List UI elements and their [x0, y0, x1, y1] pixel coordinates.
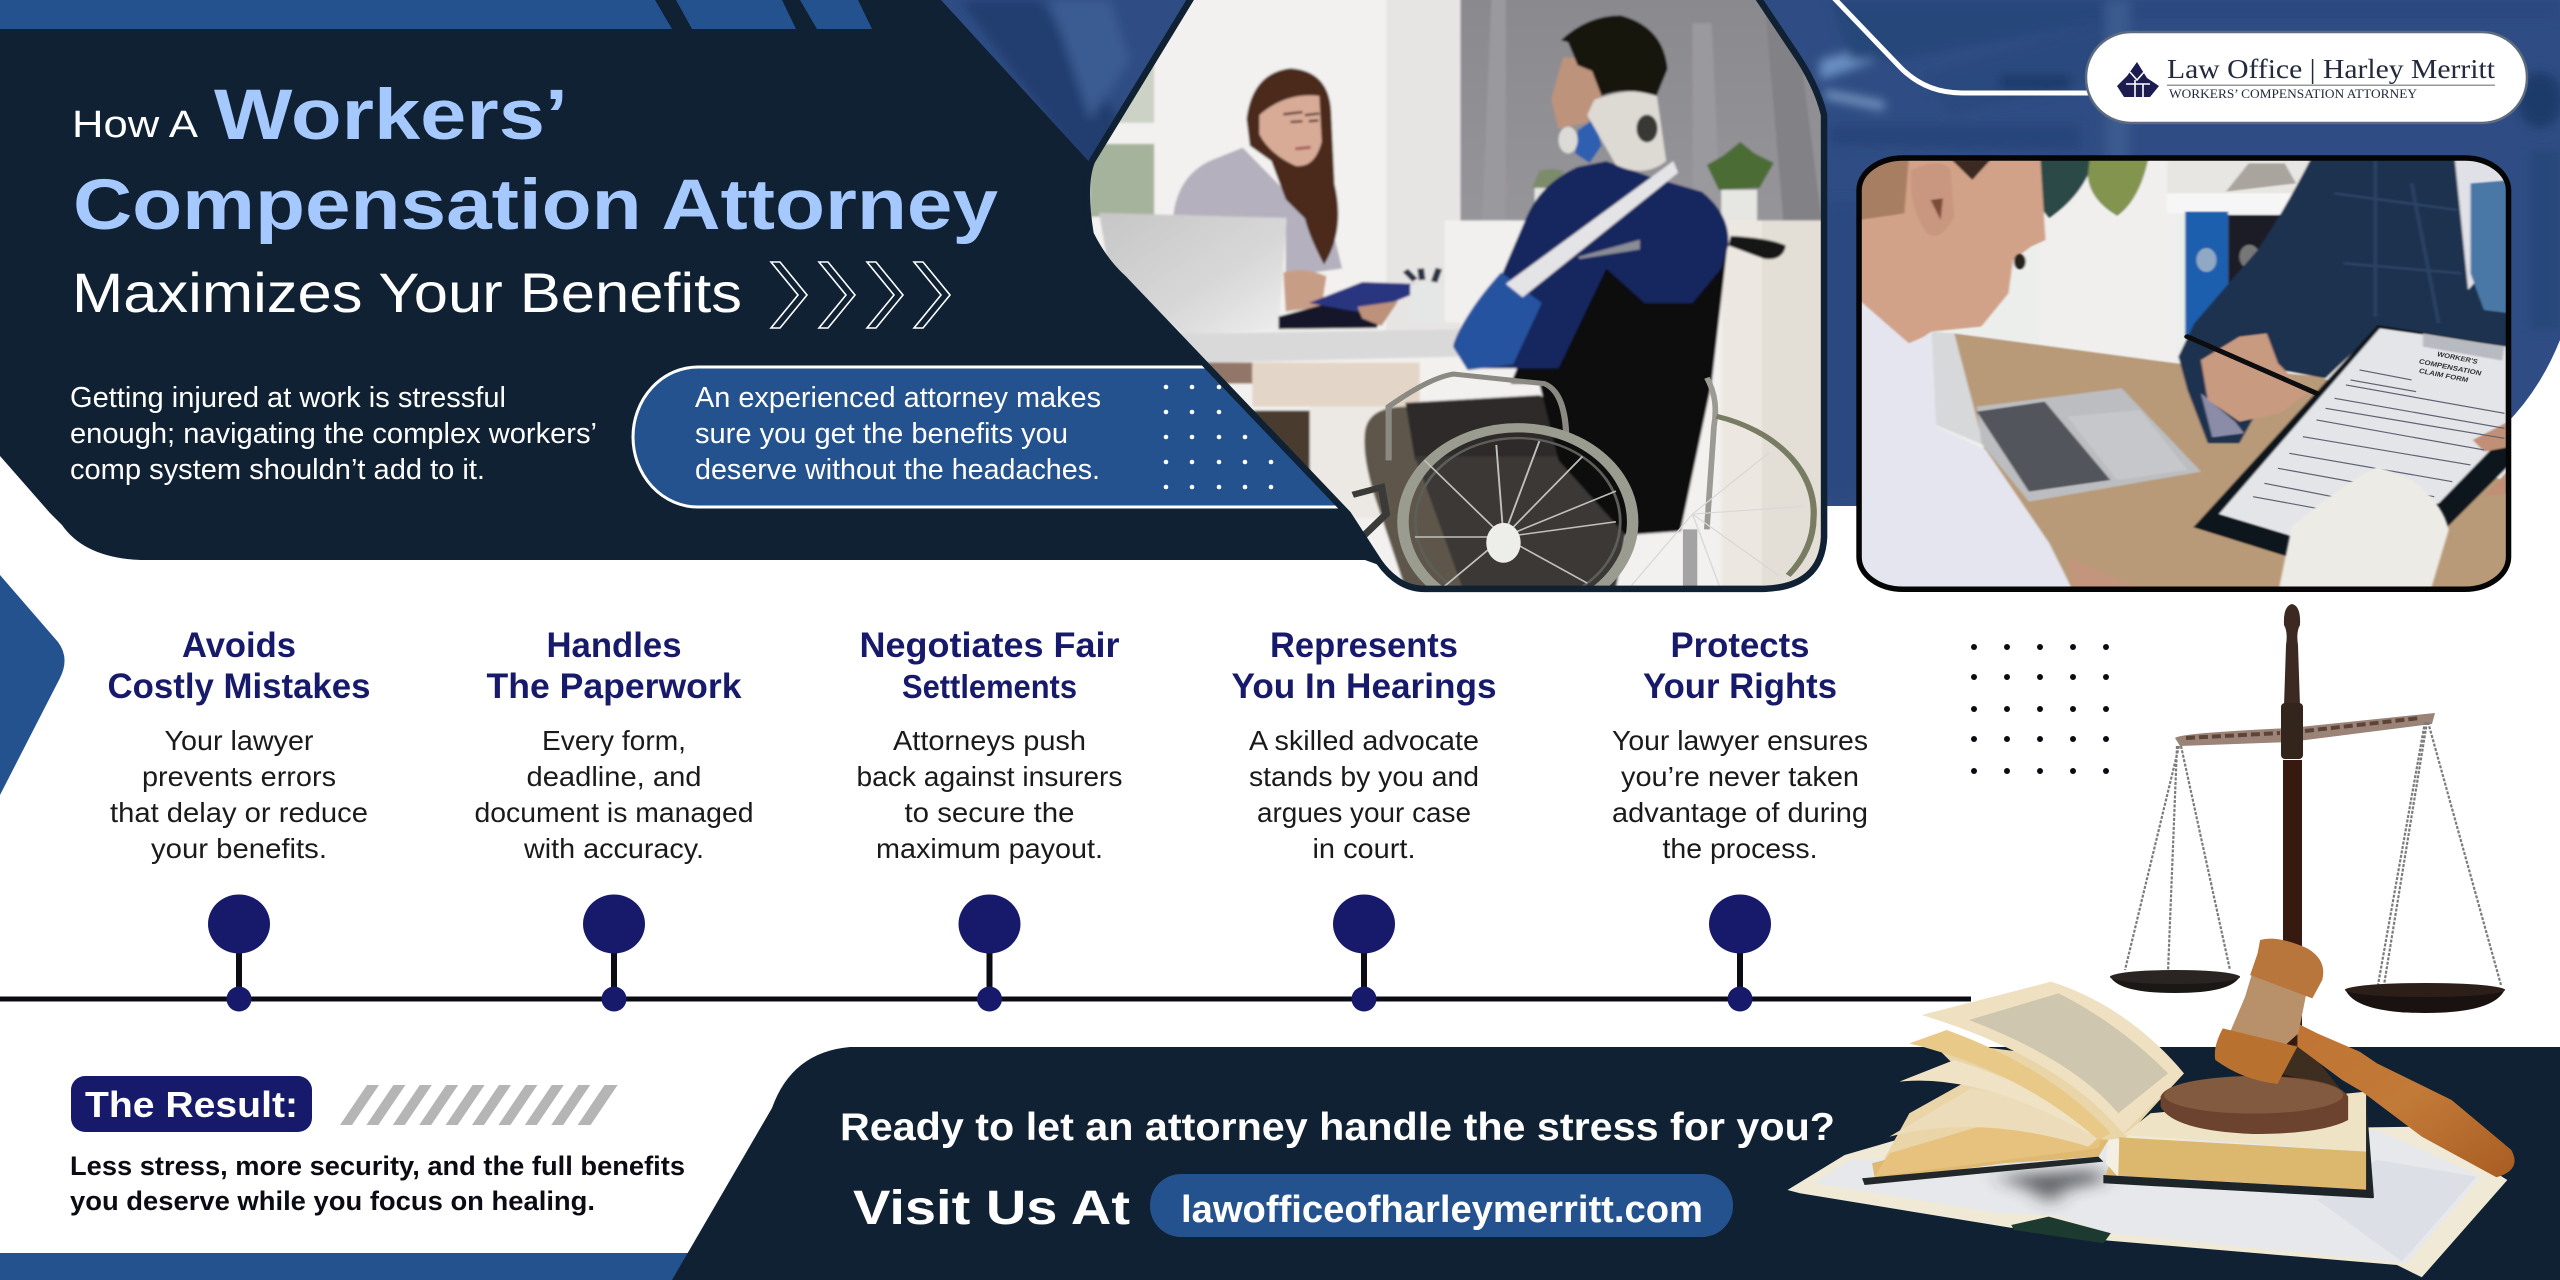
benefit: handles the paperwork: The Paperwork: [486, 667, 742, 706]
benefit: protects your rights: Protects: [1670, 626, 1810, 665]
benefit: avoids costly mistakes: Your lawyer: [164, 725, 314, 756]
benefit: negotiates fair settlements: [856, 626, 1122, 1012]
benefit: protects your rights: advantage of during: [1612, 797, 1868, 828]
left edge arrow tab: [0, 575, 65, 795]
photo: claim form review: [1850, 150, 2529, 597]
lower book: [1787, 1127, 2507, 1277]
benefit: avoids costly mistakes: Avoids: [182, 626, 296, 665]
illustration: law books and gavel: [1787, 939, 2515, 1277]
form title: WORKER'S: [2436, 350, 2479, 366]
benefit: protects your rights: Your Rights: [1643, 667, 1837, 706]
striped accent: [340, 1085, 618, 1125]
callout: attorney pill: deserve without the headaches.: [695, 454, 1100, 486]
form title: COMPENSATION: [2418, 358, 2483, 377]
intro text: comp system shouldn’t add to it.: [70, 454, 485, 486]
sound block: [2161, 1076, 2348, 1134]
benefit: avoids costly mistakes: your benefits.: [151, 833, 327, 864]
benefit: avoids costly mistakes: that delay or reduce: [110, 797, 368, 828]
timeline line: [0, 996, 1971, 1002]
benefit: avoids costly mistakes: prevents errors: [142, 761, 336, 792]
timeline marker: [208, 894, 270, 1012]
title: Compensation Attorney: [73, 166, 999, 245]
result text: Less stress, more security, and the full benefits: [70, 1151, 685, 1181]
benefit: avoids costly mistakes: Costly Mistakes: [108, 667, 370, 706]
benefit: represents you in hearings: A skilled advocate: [1249, 725, 1479, 756]
illustration: scales of justice: [2110, 604, 2505, 1080]
title: [72, 76, 999, 324]
benefit: handles the paperwork: Every form,: [542, 725, 686, 756]
upper open book: [1862, 982, 2374, 1198]
benefit: negotiates fair settlements: to secure the: [904, 797, 1074, 828]
dot grid: [1971, 644, 2109, 774]
title: How A: [72, 104, 199, 146]
website pill: lawofficeofharleymerritt.com: [1181, 1189, 1703, 1231]
result text: [70, 1151, 685, 1216]
title: Maximizes Your Benefits: [72, 261, 742, 324]
benefit: negotiates fair settlements: back against insurers: [856, 761, 1122, 792]
benefit: handles the paperwork: Handles: [546, 626, 682, 665]
intro text: enough; navigating the complex workers’: [70, 418, 597, 450]
icon: chevrons: [771, 262, 950, 328]
result badge: The Result:: [85, 1084, 298, 1125]
benefit: represents you in hearings: stands by you and: [1249, 761, 1479, 792]
benefit: negotiates fair settlements: maximum payout.: [876, 833, 1103, 864]
top accent bars: [0, 0, 872, 29]
callout: attorney pill: An experienced attorney makes: [695, 382, 1101, 414]
benefit: negotiates fair settlements: Settlements: [902, 668, 1077, 705]
benefit: represents you in hearings: argues your case: [1257, 797, 1471, 828]
benefit: protects your rights: Your lawyer ensures: [1612, 725, 1868, 756]
benefit: represents you in hearings: [1232, 626, 1496, 1012]
cta heading: Ready to let an attorney handle the stress for you?: [840, 1106, 1835, 1149]
benefit: negotiates fair settlements: Negotiates Fair: [860, 626, 1120, 665]
callout: attorney pill: sure you get the benefits you: [695, 418, 1068, 450]
call to action panel: [672, 1047, 2560, 1280]
scale base: [2280, 1040, 2340, 1088]
photo: injured worker consultation: [1080, 0, 1846, 616]
benefit: avoids costly mistakes: [108, 626, 370, 1012]
benefit: protects your rights: the process.: [1662, 833, 1818, 864]
bottom blue band: [0, 1253, 700, 1280]
timeline marker: [583, 894, 645, 1012]
timeline marker: [1333, 894, 1395, 1012]
intro text: Getting injured at work is stressful: [70, 382, 506, 414]
benefit: handles the paperwork: with accuracy.: [523, 833, 704, 864]
logo pill: Law Office | Harley Merritt: [2167, 54, 2496, 84]
logo pill: WORKERS’ COMPENSATION ATTORNEY: [2169, 86, 2418, 101]
dark navy header panel: [0, 0, 1420, 580]
benefit: protects your rights: you’re never taken: [1621, 761, 1859, 792]
icon: logo mark: [2117, 62, 2159, 97]
timeline marker: [1709, 894, 1771, 1012]
intro text: [70, 382, 597, 486]
benefit: represents you in hearings: You In Hearings: [1232, 667, 1496, 706]
website pill: [1150, 1174, 1733, 1237]
form title: [2419, 352, 2482, 382]
logo pill: [2086, 32, 2527, 123]
form title: CLAIM FORM: [2418, 367, 2470, 384]
benefit: represents you in hearings: Represents: [1270, 626, 1458, 665]
benefit: handles the paperwork: [474, 626, 754, 1012]
benefit: negotiates fair settlements: Attorneys push: [893, 725, 1086, 756]
pill dot grid: [1164, 385, 1273, 489]
header background photo: [900, 0, 2560, 510]
result text: you deserve while you focus on healing.: [70, 1186, 595, 1216]
benefit: handles the paperwork: document is managed: [474, 797, 754, 828]
timeline marker: [958, 894, 1020, 1012]
benefit: represents you in hearings: in court.: [1312, 833, 1416, 864]
benefit: handles the paperwork: deadline, and: [526, 761, 702, 792]
connector line to logo: [1832, 0, 2090, 93]
gavel: [2215, 939, 2515, 1177]
title: Workers’: [214, 76, 568, 155]
result badge: [71, 1076, 312, 1132]
benefit: protects your rights: [1612, 626, 1868, 1012]
cta visit: Visit Us At: [853, 1182, 1130, 1235]
callout: attorney pill: [633, 367, 1360, 507]
